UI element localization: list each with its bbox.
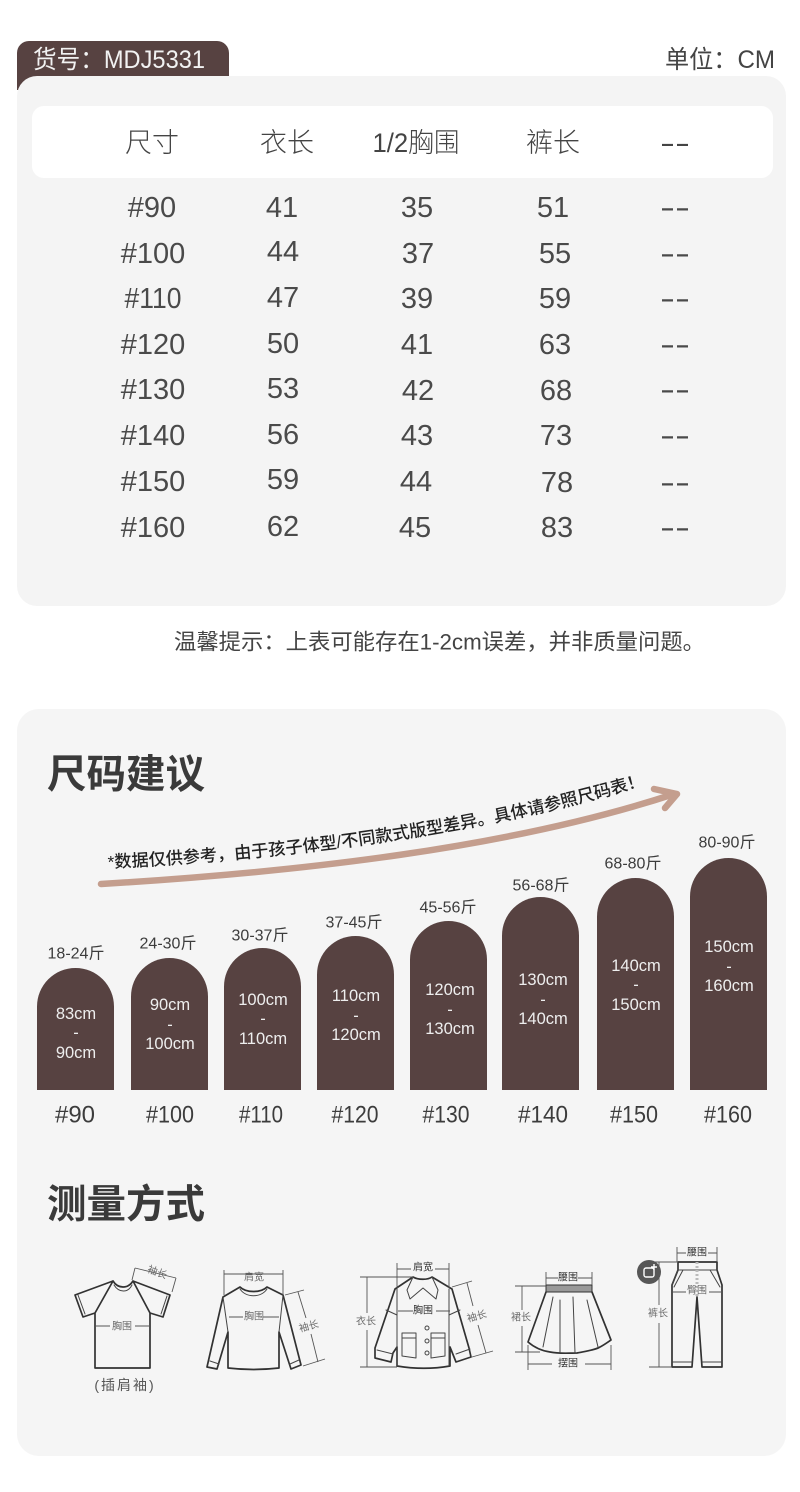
bar #130: #130 — [422, 1102, 470, 1128]
table rows: #120 — [121, 329, 185, 361]
table rows: -- — [660, 374, 690, 406]
table rows: 45 — [399, 512, 431, 544]
bar #100 — [131, 934, 208, 1128]
tip note: 温馨提示：上表可能存在1-2cm误差，并非质量问题。 — [174, 630, 705, 654]
table header row: 衣长 — [260, 128, 314, 158]
icon: skirt: 腰围 — [558, 1272, 578, 1284]
bar #160: #160 — [704, 1102, 752, 1128]
table rows: 51 — [537, 192, 569, 224]
bar #100: #100 — [146, 1102, 194, 1128]
icon: skirt: 裙长 — [511, 1310, 531, 1324]
bar #120: 110cm — [332, 987, 380, 1005]
icon: jacket — [356, 1260, 493, 1368]
bar #90: - — [73, 1024, 79, 1042]
icon: jacket: 肩宽 — [413, 1260, 433, 1274]
icon: raglan t-shirt — [75, 1263, 176, 1393]
table header row: -- — [660, 128, 690, 158]
item number tab — [17, 41, 229, 100]
bar #120: 120cm — [331, 1026, 381, 1044]
table rows: 35 — [401, 192, 433, 224]
bar #150: #150 — [610, 1102, 658, 1128]
table rows: #90 — [128, 192, 176, 224]
table rows: 41 — [401, 329, 433, 361]
icon: raglan t-shirt: (插肩袖) — [94, 1377, 156, 1393]
table rows: 68 — [540, 375, 572, 407]
arrow with note: *数据仅供参考，由于孩子体型/不同款式版型差异。具体请参照尺码表！ — [108, 776, 634, 869]
table header row: 裤长 — [526, 128, 580, 158]
icon: sweater — [207, 1270, 325, 1370]
bar #130 — [410, 898, 487, 1128]
bar #120 — [317, 914, 394, 1128]
bar #140: 140cm — [518, 1010, 568, 1028]
bar #110: - — [260, 1010, 266, 1028]
table rows: 73 — [540, 420, 572, 452]
icon: skirt — [511, 1272, 611, 1370]
bar #110 — [224, 926, 301, 1128]
table rows: 59 — [267, 464, 299, 496]
bar #90: 90cm — [56, 1044, 96, 1062]
bar #120: - — [353, 1007, 359, 1025]
table rows: 43 — [401, 420, 433, 452]
bar #140 — [502, 876, 579, 1128]
icon: trousers: 腰围 — [687, 1246, 707, 1258]
bar #130: 45-56斤 — [420, 898, 476, 916]
table rows: -- — [660, 283, 690, 315]
bar #110: #110 — [239, 1102, 283, 1128]
table rows: #110 — [124, 283, 182, 315]
table rows: 41 — [266, 192, 298, 224]
icon: sweater: 袖长 — [297, 1317, 320, 1335]
icon: raglan t-shirt: 袖长 — [146, 1263, 169, 1282]
table rows: 39 — [401, 283, 433, 315]
table rows — [121, 192, 690, 544]
table rows: 42 — [402, 375, 434, 407]
panel: size recommendation and measuring — [17, 709, 786, 1456]
bar #110: 110cm — [239, 1030, 287, 1048]
bar #130: - — [447, 1001, 453, 1019]
bar #90 — [37, 944, 114, 1128]
icon: skirt: 摆围 — [558, 1356, 578, 1370]
bar #160: 160cm — [704, 977, 754, 995]
unit label: 单位：CM — [665, 46, 775, 74]
table rows: -- — [660, 420, 690, 452]
bar #160 — [690, 834, 767, 1128]
icon: jacket: 胸围 — [413, 1304, 433, 1316]
table rows: 37 — [402, 238, 434, 270]
table rows: 47 — [267, 282, 299, 314]
icon: add image badge — [637, 1260, 661, 1284]
table rows: 78 — [541, 467, 573, 499]
table rows: #160 — [121, 512, 185, 544]
bar #150: 150cm — [611, 996, 661, 1014]
bar #120: #120 — [332, 1102, 378, 1128]
icon: trousers: 裤长 — [648, 1306, 668, 1320]
table rows: 63 — [539, 329, 571, 361]
table rows: -- — [660, 329, 690, 361]
bar #100: 24-30斤 — [140, 934, 196, 952]
table rows: #130 — [121, 374, 185, 406]
icon: sweater: 肩宽 — [244, 1270, 264, 1284]
bar #110: 30-37斤 — [232, 926, 288, 944]
bar #130: 130cm — [425, 1020, 475, 1038]
bar #140: #140 — [518, 1102, 568, 1128]
bar #150: 68-80斤 — [605, 854, 661, 872]
table rows: 44 — [400, 466, 432, 498]
icon: raglan t-shirt: 胸围 — [112, 1320, 132, 1332]
bar #120: 37-45斤 — [326, 914, 382, 932]
icon: sweater: 胸围 — [244, 1310, 264, 1322]
panel: size table — [17, 76, 786, 606]
bar #90: #90 — [55, 1102, 95, 1128]
bar #110: 100cm — [238, 991, 288, 1009]
table rows: -- — [660, 512, 690, 544]
table rows: #140 — [121, 420, 185, 452]
bar #90: 83cm — [56, 1005, 96, 1023]
table rows: 44 — [267, 236, 299, 268]
item number tab: 货号：MDJ5331 — [33, 46, 205, 74]
bar #130: 120cm — [425, 981, 475, 999]
table header row: 1/2胸围 — [372, 128, 460, 158]
table rows: 56 — [267, 419, 299, 451]
icon: jacket: 袖长 — [465, 1307, 488, 1325]
bar #100: - — [167, 1016, 173, 1034]
bar #140: - — [540, 991, 546, 1009]
table rows: -- — [660, 192, 690, 224]
table rows: -- — [660, 238, 690, 270]
table header row — [32, 106, 773, 178]
table rows: 55 — [539, 238, 571, 270]
bar chart: height by weight — [37, 834, 767, 1128]
icon: trousers: 臀围 — [687, 1284, 707, 1296]
table rows: #150 — [121, 466, 185, 498]
icon: jacket: 衣长 — [356, 1314, 376, 1328]
table rows: 53 — [267, 373, 299, 405]
table rows: -- — [660, 467, 690, 499]
table rows: #100 — [121, 238, 185, 270]
heading: size recommendation: 尺码建议 — [47, 753, 205, 797]
table rows: 83 — [541, 512, 573, 544]
bar #150: - — [633, 976, 639, 994]
bar #140: 130cm — [518, 971, 568, 989]
bar #140: 56-68斤 — [513, 876, 569, 894]
bar #160: - — [726, 958, 732, 976]
bar #160: 80-90斤 — [699, 834, 755, 852]
table rows: 62 — [267, 511, 299, 543]
icon: trousers — [648, 1246, 722, 1367]
table header row: 尺寸 — [125, 128, 179, 158]
bar #160: 150cm — [704, 938, 754, 956]
table rows: 50 — [267, 328, 299, 360]
heading: measuring method: 测量方式 — [47, 1183, 205, 1227]
bar #100: 90cm — [150, 996, 190, 1014]
table rows: 59 — [539, 283, 571, 315]
bar #150 — [597, 854, 674, 1128]
bar #90: 18-24斤 — [48, 944, 104, 962]
bar #150: 140cm — [611, 957, 661, 975]
bar #100: 100cm — [145, 1035, 195, 1053]
